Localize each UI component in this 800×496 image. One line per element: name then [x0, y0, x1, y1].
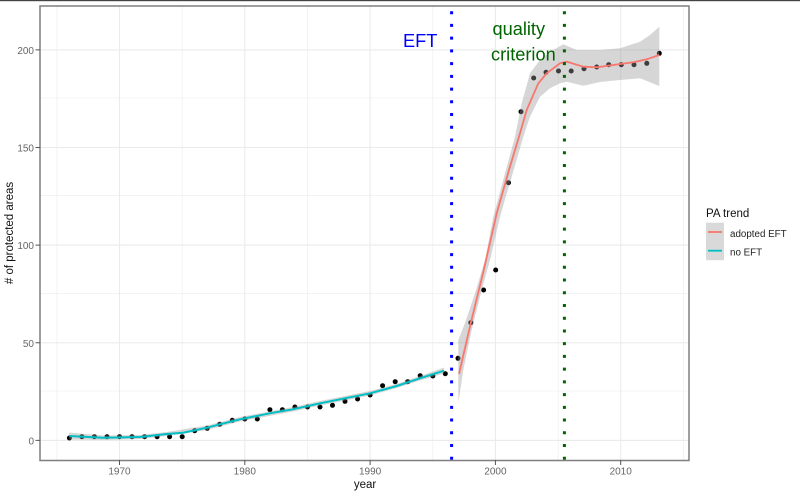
trend line: adopted EFT: [459, 55, 659, 374]
x axis: 1990: [359, 466, 382, 478]
y axis: 200: [17, 46, 34, 57]
confidence band: no EFT: [69, 368, 444, 440]
legend: [706, 208, 787, 260]
y axis: 150: [17, 144, 34, 154]
x axis: [108, 460, 632, 478]
y axis: [17, 46, 40, 448]
legend key: no EFT: [708, 250, 722, 252]
x axis: 2010: [610, 466, 632, 478]
x axis title: year: [354, 479, 376, 491]
y axis: 0: [28, 436, 34, 448]
annotation: quality criterion: criterion: [491, 44, 556, 64]
legend key: adopted EFT: [708, 231, 722, 233]
confidence band: adopted EFT: [458, 27, 659, 403]
x axis: 1980: [234, 466, 256, 478]
panel border: [40, 6, 689, 460]
quality criterion vertical dotted line: [563, 11, 566, 460]
y axis title: # of protected areas: [4, 182, 16, 284]
x axis: 2000: [484, 466, 507, 478]
legend label: adopted EFT: adopted EFT: [730, 229, 787, 240]
y axis: 50: [23, 339, 34, 350]
legend label: no EFT: no EFT: [730, 248, 762, 258]
EFT vertical dotted line: [450, 11, 453, 460]
annotation: quality criterion: [491, 19, 556, 64]
x axis: 1970: [108, 466, 131, 478]
annotation: quality criterion: quality: [492, 19, 546, 39]
annotation: EFT: EFT: [403, 31, 437, 51]
data points: [67, 51, 662, 441]
legend title: PA trend: [706, 208, 749, 220]
trend line: no EFT: [69, 371, 444, 438]
legend key background: [706, 223, 724, 260]
y axis: 100: [17, 241, 34, 252]
